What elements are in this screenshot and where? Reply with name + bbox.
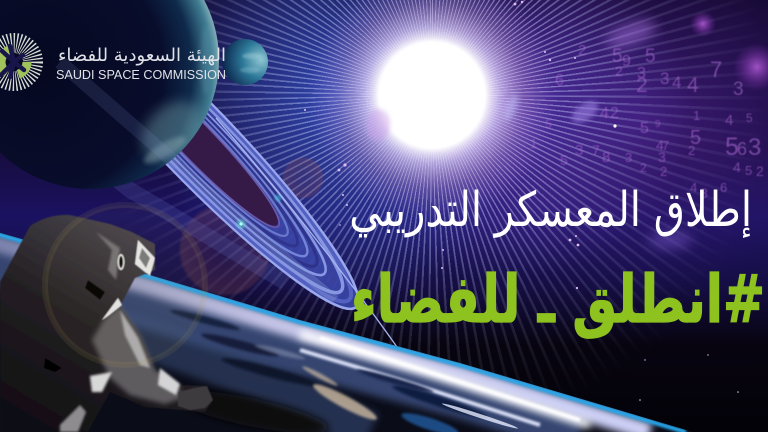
floating numbers: 2 [636, 74, 648, 97]
floating numbers: 5 [745, 163, 752, 178]
floating numbers: 3 [575, 142, 583, 159]
floating numbers: 3 [748, 134, 761, 161]
large planet [0, 0, 219, 189]
floating numbers: 2 [615, 63, 623, 79]
floating numbers: 3 [733, 79, 744, 100]
floating numbers: 5 [560, 152, 568, 168]
logo [0, 43, 226, 82]
ring inner dark [101, 43, 289, 237]
astronaut patches [85, 280, 105, 300]
ring sparkles [236, 194, 282, 229]
floating numbers: 4 [600, 105, 609, 122]
floating numbers: 4 [725, 112, 733, 129]
logo emblem [0, 43, 33, 81]
floating numbers: 4 [672, 73, 681, 92]
floating numbers: 7 [710, 57, 722, 82]
sun [307, 0, 557, 220]
floating numbers: 9 [655, 119, 661, 130]
floating numbers: 5 [612, 46, 623, 67]
floating numbers: 4 [656, 137, 664, 153]
astronaut arm [92, 306, 182, 404]
floating numbers [530, 42, 764, 201]
floating numbers: 2 [688, 143, 695, 158]
floating numbers: 6 [720, 180, 727, 195]
floating numbers: 8 [602, 149, 610, 166]
floating numbers: 9 [622, 53, 631, 70]
ring band base [7, 0, 383, 333]
floating numbers: 4 [733, 159, 741, 175]
small planet [222, 39, 268, 85]
logo arabic name: الهيئة السعودية للفضاء [58, 45, 226, 66]
floating numbers: 6 [737, 139, 747, 159]
floating numbers: 2 [610, 105, 619, 122]
logo english name: SAUDI SPACE COMMISSION [56, 68, 226, 82]
astronaut [0, 215, 213, 432]
earth [0, 225, 700, 432]
floating numbers: 5 [545, 117, 552, 131]
large lens flare ring [45, 205, 205, 365]
floating numbers: 7 [662, 138, 669, 153]
floating numbers: 7 [592, 142, 600, 158]
glow blobs [502, 11, 768, 249]
background: sun rays [140, 0, 737, 386]
astronaut glove [178, 386, 213, 410]
planet rings [7, 0, 383, 333]
floating numbers: 4 [687, 74, 699, 97]
sparkle dust [304, 1, 739, 401]
floating numbers: 3 [658, 149, 666, 165]
floating numbers: 5 [645, 46, 656, 67]
ring outer line and light bands [0, 62, 397, 347]
floating numbers: 4 [690, 180, 697, 195]
floating numbers: 5 [746, 111, 753, 125]
floating numbers: 6 [555, 72, 564, 89]
floating numbers: 5 [640, 120, 649, 137]
floating numbers: 3 [625, 150, 632, 165]
lens flares [178, 157, 324, 297]
astronaut body [0, 215, 213, 432]
astronaut helmet [135, 240, 155, 276]
floating numbers: 3 [637, 65, 646, 82]
floating numbers: 8 [700, 185, 708, 201]
floating numbers: 1 [530, 136, 537, 151]
heading: إطلاق المعسكر التدريبي [349, 183, 752, 238]
floating numbers: 5 [725, 133, 739, 161]
floating numbers: 2 [640, 161, 647, 175]
floating numbers: 2 [578, 42, 586, 59]
floating numbers: 5 [690, 127, 701, 149]
floating numbers: 1 [693, 108, 700, 123]
floating numbers: 2 [660, 164, 667, 179]
hashtag: #انطلق ـ للفضاء [351, 261, 765, 339]
ring band crossing planet [60, 62, 178, 165]
floating numbers: 3 [660, 69, 669, 88]
floating numbers: 2 [756, 163, 764, 179]
